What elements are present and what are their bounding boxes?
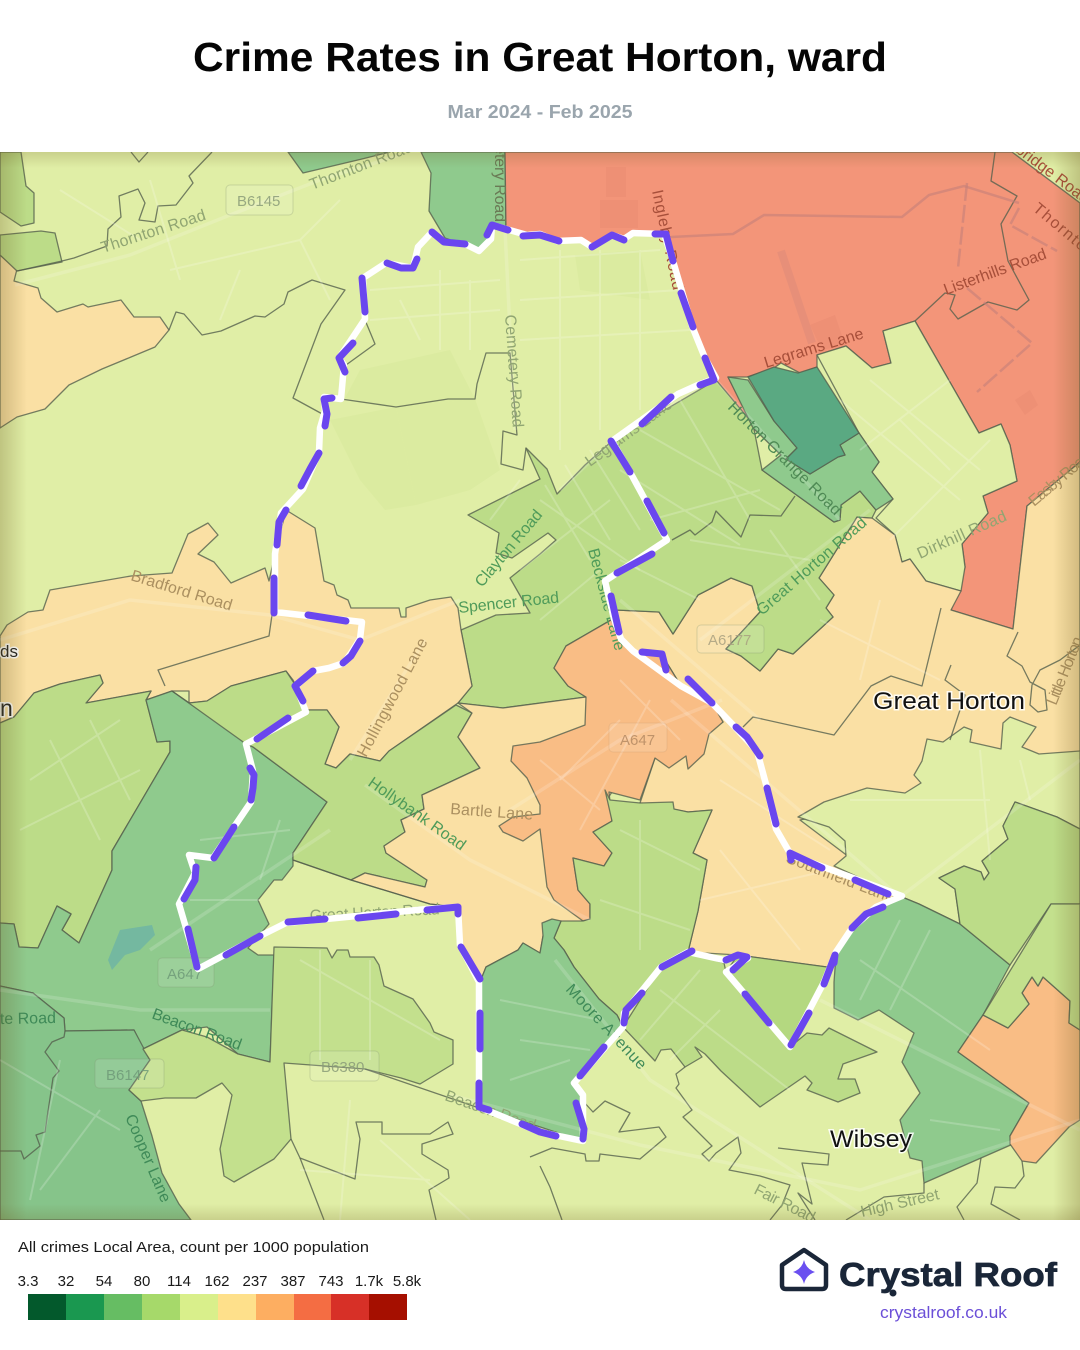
region: red area north-east (505, 152, 1080, 629)
label: road names: Dirkhill Road (915, 508, 1009, 563)
region: peach west band (0, 510, 472, 768)
region: green Horton (605, 380, 876, 671)
label: road names: Thornton Road (307, 139, 415, 194)
legend values: 80 (134, 1273, 150, 1290)
label: road shields: B6380 (321, 1059, 364, 1076)
region: dark green (748, 367, 859, 474)
logo: Crystal Roof (782, 1250, 1058, 1322)
legend values: 237 (242, 1273, 268, 1290)
label: road names: Cemetery Road (501, 314, 526, 428)
legend values: 32 (58, 1273, 74, 1290)
icon: pond (108, 925, 155, 970)
label: road names: Horton Grange Road (724, 399, 844, 519)
label: road names: Cemetery Road (491, 112, 508, 222)
label: road names: High Street (859, 1186, 941, 1221)
region: mid green Horton Grange (728, 377, 893, 522)
logo wordmark: Crystal Roof (839, 1256, 1058, 1293)
legend values: 114 (167, 1273, 191, 1290)
label: road shields: B6145 (237, 193, 280, 210)
label: place names: ds (0, 642, 18, 661)
region: left light green (0, 675, 170, 948)
region: east mid green (834, 897, 1029, 1183)
subtitle: date range: Mar 2024 - Feb 2025 (448, 102, 632, 122)
legend values: 54 (96, 1273, 112, 1290)
label: road names: te Road (0, 1010, 56, 1028)
region: Beacon Road green (129, 947, 453, 1182)
railway and tram lines in red area (671, 183, 1057, 392)
label: road names: Fair Road (751, 1181, 818, 1227)
label: road names: Legrams Lane (762, 325, 866, 372)
region: orange A647 (499, 620, 723, 921)
legend values: 3.3 (18, 1273, 38, 1290)
region: top-left green patches (0, 152, 34, 226)
road network (0, 155, 1080, 1220)
title: Crime Rates in Great Horton, ward (193, 34, 887, 80)
label: road names: Clayton Road (472, 507, 546, 591)
legend values: 1.7k (355, 1273, 384, 1290)
label: place names: Wibsey (830, 1126, 912, 1153)
region: south light green (623, 952, 877, 1107)
label: road shields: A647 (620, 732, 655, 749)
region: far south-west green (0, 986, 191, 1220)
logo key detail on y (890, 1290, 896, 1296)
region: north green beside cemetery (421, 152, 506, 250)
ward boundary: white base with purple dashes (179, 225, 902, 1141)
label: road names: Listerhills Road (942, 246, 1049, 299)
region: south-west green (0, 691, 327, 1062)
region: mid green Moore Avenue (479, 919, 623, 1141)
region: central peach (350, 696, 612, 976)
legend values: 162 (204, 1273, 230, 1290)
label: road names: Great Horton Road (309, 901, 440, 925)
legend values: 387 (280, 1273, 306, 1290)
label: road names: Hollingwood Lane (355, 635, 432, 760)
legend title: All crimes Local Area, count per 1000 population (18, 1239, 369, 1256)
label: road names: Great Horton Road (753, 514, 870, 619)
region: light east of Legrams (817, 321, 1017, 591)
label: road names: Cooper Lane (121, 1112, 174, 1205)
region: light Great Horton east (798, 717, 1080, 924)
region: peach Great Horton (616, 462, 1080, 967)
region: light green Moore north (554, 790, 712, 1027)
label: place names: n (0, 695, 13, 721)
label: place names (0, 642, 1025, 1153)
region: Hollybank light green (246, 705, 480, 887)
region: green centre (458, 444, 612, 708)
region: east green (939, 802, 1080, 965)
boundary outlines (0, 152, 1080, 1220)
label: road shields: A6177 (708, 632, 751, 649)
label: road names: Beacon Road (443, 1088, 538, 1135)
legend (18, 1239, 422, 1320)
label: road shields: A647 (167, 966, 202, 983)
icon: house with sparkle (782, 1250, 826, 1289)
region: west peach (0, 255, 169, 428)
label: road names: Beckside Lane (584, 547, 628, 653)
label: road names: Hollybank Road (365, 774, 469, 854)
label: road shields: B6147 (106, 1067, 149, 1084)
land-use patches (330, 250, 650, 510)
street grid (0, 180, 1030, 1220)
region: green triangle (729, 956, 827, 1041)
region: far east orange (958, 977, 1080, 1163)
label: road names: Thornton Road (99, 207, 208, 257)
label: place names: Great Horton (873, 688, 1025, 715)
label: road names: Ingleby Road (648, 188, 686, 292)
region: east green lower (983, 904, 1080, 1030)
label: road names: Southfield Lane (784, 850, 897, 907)
buildings in red area (600, 167, 1038, 415)
label: road names: Bradford Road (129, 568, 234, 615)
label: road names: Beacon Road (150, 1006, 244, 1054)
label: road names: Spencer Road (458, 590, 560, 617)
legend values: 743 (318, 1273, 344, 1290)
label: road names: Moore Avenue (562, 981, 650, 1073)
legend values: 5.8k (393, 1273, 422, 1290)
label: road shields (95, 185, 764, 1088)
label: road names: Legrams Lane (582, 396, 676, 470)
legend values (18, 1273, 422, 1290)
legend colour scale (28, 1294, 407, 1320)
label: road names: Bartle Lane (450, 801, 534, 824)
region: top green sliver (288, 152, 390, 173)
website url: crystalroof.co.uk (880, 1304, 1008, 1322)
region: north Hollybank green (172, 671, 306, 744)
